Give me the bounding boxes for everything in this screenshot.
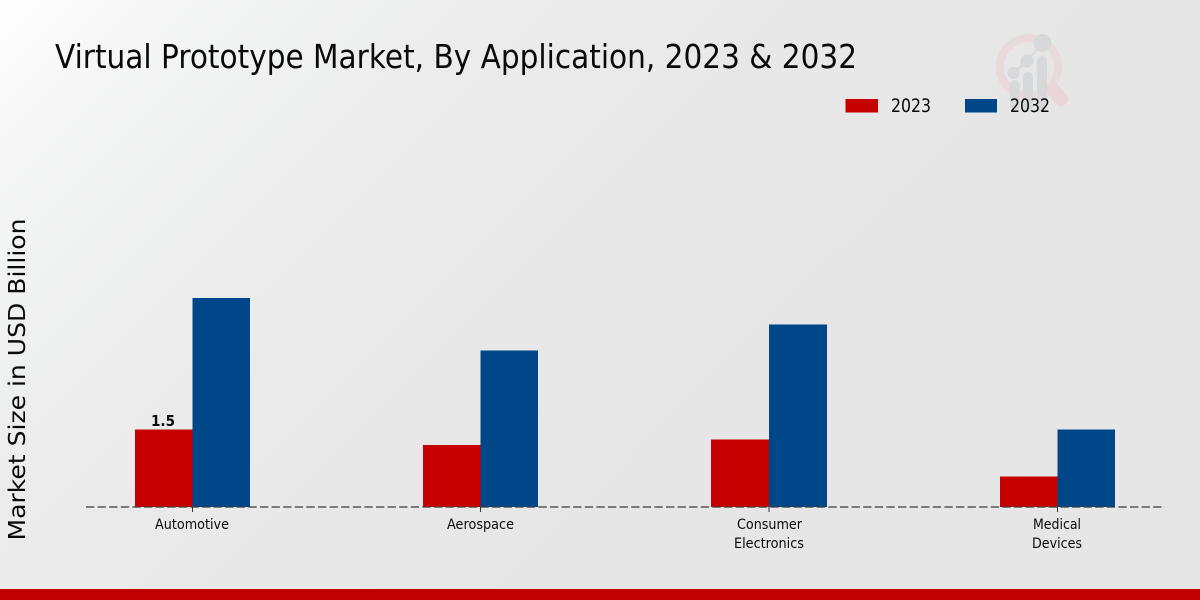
- legend item: 2032: 2032: [1010, 95, 1050, 117]
- group: Automotive: 1.5: [151, 412, 175, 430]
- legend item: 2023: [846, 95, 931, 117]
- bar chart: [135, 298, 1115, 552]
- group: Consumer Electronics: [711, 324, 827, 552]
- group: Medical Devices: [1000, 430, 1115, 552]
- group: Automotive: [135, 298, 250, 533]
- footer bar: [0, 589, 1200, 600]
- group: Aerospace: Aerospace: [447, 517, 514, 533]
- icon: watermark magnifier logo: [1000, 34, 1061, 112]
- group: Medical Devices: Medical: [1033, 517, 1081, 533]
- legend item: 2023: 2023: [891, 95, 931, 117]
- group: Aerospace: [423, 350, 538, 533]
- group: Consumer Electronics: Electronics: [734, 536, 804, 552]
- y axis label: Market Size in USD Billion: [3, 218, 31, 540]
- group: Automotive: Automotive: [155, 517, 229, 533]
- legend: [846, 95, 1050, 117]
- group: Medical Devices: Devices: [1032, 536, 1082, 552]
- title: Virtual Prototype Market, By Application, 2023 & 2032: [55, 37, 857, 76]
- group: Consumer Electronics: Consumer: [737, 517, 802, 533]
- legend item: 2032: [965, 95, 1050, 117]
